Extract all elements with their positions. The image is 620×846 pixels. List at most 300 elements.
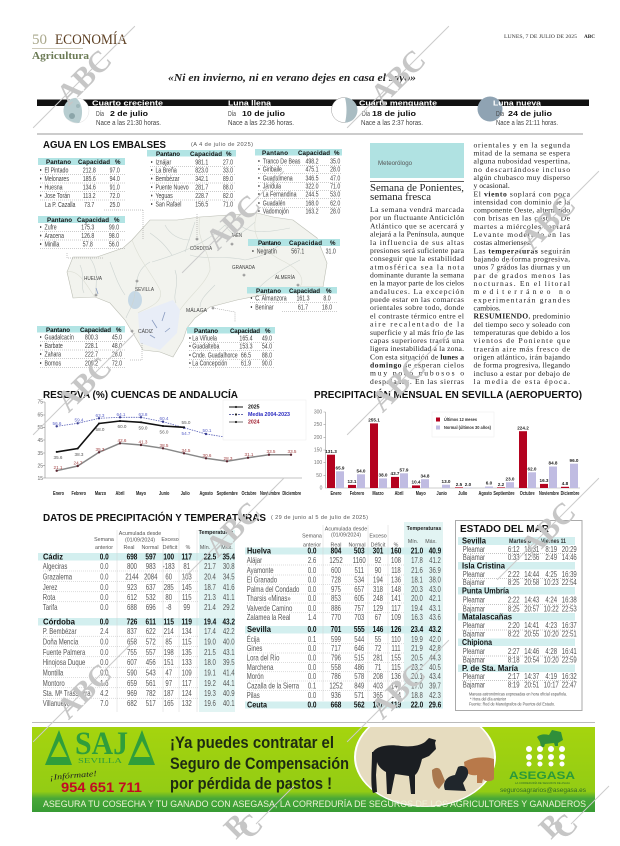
table: cadiz y cordoba: 0.0 <box>100 574 108 582</box>
table: cadiz y cordoba: 30.8 <box>223 563 235 571</box>
table: cadiz y cordoba: 117 <box>182 552 192 562</box>
table: pantanos 2: 99.0 <box>109 224 120 232</box>
table: huelva, sevilla y ceuta: 17.8 <box>411 558 423 565</box>
article column 2: componente Oeste, alternando <box>474 206 570 215</box>
ad logo: ASEGASA: ASEGASA <box>509 770 575 782</box>
table: cadiz y cordoba: 7.0 <box>100 701 108 708</box>
table: pantanos 3: • Bembézar <box>151 175 179 183</box>
table: huelva, sevilla y ceuta: 164 <box>391 693 401 700</box>
table: cadiz y cordoba: 41.6 <box>223 584 235 592</box>
table: huelva, sevilla y ceuta: 0.0 <box>308 700 316 710</box>
table: pantanos 8: 66.5 <box>241 352 252 360</box>
table: huelva, sevilla y ceuta: Normal <box>348 542 366 548</box>
table: huelva, sevilla y ceuta: Cazalla de la Sierra <box>247 683 299 691</box>
table: cadiz y cordoba: 41.1 <box>223 594 235 602</box>
panel: estado del mar: 4:19 <box>545 673 557 681</box>
heading: datos de precipitacion <box>43 511 368 524</box>
table: pantanos 7: 222.7 <box>85 351 99 359</box>
table: pantanos 4: 498.2 <box>305 158 319 166</box>
panel: estado del mar: Sevilla <box>462 536 487 546</box>
moon phases strip: Cuarto menguante <box>359 98 437 108</box>
table: huelva, sevilla y ceuta: 42.0 <box>429 636 441 644</box>
table: pantanos 1: 185.6 <box>83 175 96 183</box>
article column 1: Atlántico que se acercará y <box>370 221 464 230</box>
article column 2: unos 7 grados las diurnas y un <box>474 263 570 272</box>
panel: estado del mar: P. de Sta. María <box>462 664 519 673</box>
table: pantanos 2: 175.3 <box>81 224 95 232</box>
table: cadiz y cordoba: 969 <box>127 691 137 698</box>
table: pantanos 8: • Guadalteba <box>189 343 220 351</box>
map labels: CÓRDOBA <box>190 245 212 252</box>
table: huelva, sevilla y ceuta: 555 <box>354 624 365 634</box>
chart months: Septiembre <box>493 490 515 496</box>
table: cadiz y cordoba: 109 <box>182 670 192 678</box>
table: huelva, sevilla y ceuta: 0.1 <box>308 636 316 644</box>
table: huelva, sevilla y ceuta: 0.0 <box>308 624 316 634</box>
table: cadiz y cordoba: 17.4 <box>204 629 216 636</box>
table: pantanos 4: • La Fernandina <box>258 191 297 199</box>
article column 2 <box>474 140 571 386</box>
table: huelva, sevilla y ceuta: 0.0 <box>308 568 316 575</box>
bar chart: precipitacion sevilla: 10.4 <box>412 480 421 484</box>
article column 2: nocturnas. En el litoral <box>474 279 570 288</box>
panel: estado del mar: 0:33 <box>508 555 520 562</box>
table: huelva, sevilla y ceuta: 23.4 <box>411 624 424 634</box>
map labels: SEVILLA <box>135 287 154 293</box>
panel: estado del mar: Bajamar <box>463 631 486 639</box>
bar chart: precipitacion sevilla: 16.3 <box>540 478 549 483</box>
bar chart: precipitacion sevilla: 100 <box>314 460 322 466</box>
table: huelva, sevilla y ceuta: 0.1 <box>308 683 316 691</box>
table: cadiz y cordoba: 18.0 <box>204 660 216 667</box>
sea table notes: * Hora del día anterior <box>470 696 506 702</box>
ad logo: ASAJA: ¡Infórmate! <box>49 769 97 782</box>
table: pantanos 7: Pantano <box>46 327 70 334</box>
table: cadiz y cordoba: Déficit <box>163 545 178 551</box>
table: pantanos 3: 71.0 <box>223 201 234 209</box>
panel: estado del mar: 16:38 <box>562 597 577 605</box>
table: cadiz y cordoba: 35.4 <box>222 552 236 562</box>
table: huelva, sevilla y ceuta: 1.4 <box>308 615 316 622</box>
table: cadiz y cordoba: 983 <box>146 563 156 571</box>
table: cadiz y cordoba: 597 <box>145 552 156 562</box>
table: pantanos 8: • La Concepción <box>189 360 228 368</box>
ad logo: ASEGASA: LA CORREDURÍA DE SEGUROS DE ASAJA <box>515 781 570 785</box>
bar chart: precipitacion sevilla: 12.1 <box>348 479 357 484</box>
table: huelva, sevilla y ceuta: 20.1 <box>411 674 423 681</box>
table: huelva, sevilla y ceuta: 578 <box>354 674 364 681</box>
heading: agua en los embalses <box>43 140 253 151</box>
table: pantanos 4: • Vadomojón <box>258 208 289 216</box>
article column 1: domingo se esperan cielos <box>370 360 464 370</box>
line chart: reserva: 59.4 <box>75 418 84 422</box>
table: cadiz y cordoba: Córdoba <box>43 618 76 626</box>
page header: 50 <box>32 32 47 48</box>
table: pantanos 4: • Jándula <box>258 183 282 191</box>
table: pantanos 6: Capacidad <box>289 288 320 295</box>
panel: estado del mar: Bajamar <box>463 606 486 614</box>
table: pantanos 6: 18.0 <box>322 304 333 312</box>
article column 2: origen atlántico, irán bajando <box>474 352 570 362</box>
table: huelva, sevilla y ceuta: 160 <box>391 546 401 556</box>
table: pantanos 3: 27.0 <box>223 159 234 167</box>
table: huelva, sevilla y ceuta: 701 <box>331 624 342 634</box>
table: cadiz y cordoba: 43.1 <box>223 649 235 657</box>
bar chart: precipitacion sevilla: 43.7 <box>391 471 400 476</box>
table: huelva, sevilla y ceuta: 16.3 <box>411 615 423 622</box>
table: cadiz y cordoba: 115 <box>182 594 192 602</box>
table: huelva, sevilla y ceuta: 141 <box>391 596 401 603</box>
table: huelva, sevilla y ceuta: 20.0 <box>411 596 423 603</box>
table: huelva, sevilla y ceuta: 44.3 <box>429 655 441 663</box>
table: huelva, sevilla y ceuta: 657 <box>354 587 364 594</box>
article column 2: martes a miércoles soplará <box>474 222 571 231</box>
icon: cuarto creciente <box>64 98 89 123</box>
table: huelva, sevilla y ceuta: 318 <box>373 587 383 594</box>
table: pantanos 6: 8.0 <box>323 295 331 303</box>
panel: estado del mar: ESTADO DEL MAR <box>460 524 549 535</box>
table: huelva, sevilla y ceuta: 0.0 <box>308 674 316 681</box>
panel: estado del mar: Viernes 11 <box>541 538 566 545</box>
table: cadiz y cordoba: Sta. Mª Trassierra <box>43 689 91 698</box>
table: huelva, sevilla y ceuta: Tharsis «Minas» <box>247 596 291 603</box>
chart months: Agosto <box>479 490 492 496</box>
panel: estado del mar: Bajamar <box>463 682 486 690</box>
table: cadiz y cordoba: Jerez <box>43 584 58 592</box>
table: pantanos 3: Pantano <box>156 151 180 158</box>
table: pantanos 4: 168.0 <box>305 200 319 208</box>
table: cadiz y cordoba: Temperaturas <box>199 530 233 536</box>
table: pantanos 6: • C. Almanzora <box>250 295 287 303</box>
table: cadiz y cordoba: 22.5 <box>204 552 217 562</box>
table: huelva, sevilla y ceuta: Gines <box>247 646 263 653</box>
table: huelva, sevilla y ceuta: 0.0 <box>308 693 316 700</box>
table: pantanos 4: 47.0 <box>330 175 341 183</box>
panel: estado del mar: 22:51 <box>562 631 577 639</box>
watermark: ABC stamps: ABC <box>364 43 432 111</box>
table: huelva, sevilla y ceuta: 0.0 <box>308 596 316 603</box>
panel: estado del mar: 20:54 <box>524 657 539 665</box>
table: pantanos 3: 281.7 <box>195 184 209 192</box>
panel: estado del mar: 22:53 <box>562 606 577 614</box>
moon phases strip: 10 de julio <box>242 109 285 118</box>
table: huelva, sevilla y ceuta: 786 <box>331 674 341 681</box>
table: pantanos 3: 228.7 <box>195 192 209 200</box>
chart months: Febrero <box>350 490 364 496</box>
table: huelva, sevilla y ceuta: Morón <box>247 674 264 681</box>
article column 2: alguna nubosidad vespertina, <box>474 157 570 166</box>
line chart: reserva: 75 <box>37 400 43 406</box>
table: pantanos 3: 342.1 <box>195 175 209 183</box>
chart months: Agosto <box>200 490 213 496</box>
table: cadiz y cordoba: Normal <box>141 545 159 551</box>
table: pantanos 6: 161.3 <box>296 295 310 303</box>
table: cadiz y cordoba: 40.0 <box>223 639 235 647</box>
table: huelva, sevilla y ceuta: 40.5 <box>429 664 441 672</box>
table: cadiz y cordoba: 923 <box>127 584 137 592</box>
bar chart: precipitacion sevilla: 255.1 <box>368 418 380 422</box>
panel: estado del mar: 20:58 <box>524 580 539 587</box>
table: cadiz y cordoba: 572 <box>146 639 156 647</box>
watermark: ABC stamps: C <box>546 807 585 846</box>
table: cadiz y cordoba: 0.0 <box>100 563 108 571</box>
table: pantanos 1: 134.6 <box>83 184 96 192</box>
panel: estado del mar: 10:23 <box>544 580 559 587</box>
table: pantanos 4: 322.0 <box>305 183 319 191</box>
table: huelva, sevilla y ceuta: 42.3 <box>429 693 441 700</box>
table: cadiz y cordoba: 43.2 <box>222 617 235 627</box>
table: cadiz y cordoba: 19.3 <box>204 691 216 698</box>
table: pantanos 4: 475.1 <box>305 166 319 174</box>
table: pantanos 4: 28.0 <box>330 208 341 216</box>
table: huelva, sevilla y ceuta: 126 <box>391 624 401 634</box>
table: huelva, sevilla y ceuta: 194 <box>373 577 383 585</box>
table: huelva, sevilla y ceuta: Sevilla <box>247 625 272 634</box>
panel: estado del mar: 6:12 <box>508 546 520 554</box>
table: cadiz y cordoba: Rota <box>43 594 55 602</box>
table: cadiz y cordoba: 698 <box>127 552 137 562</box>
table: pantanos 7: • Barbate <box>40 342 63 350</box>
table: pantanos 5: Capacidad <box>289 240 322 247</box>
watermark: ABC stamps: ABC <box>364 350 432 418</box>
table: cadiz y cordoba: Semana <box>94 537 114 543</box>
table: cadiz y cordoba: 41.4 <box>223 670 235 678</box>
table: huelva, sevilla y ceuta: 703 <box>354 615 364 622</box>
panel: meteorologo <box>370 143 464 182</box>
table: huelva, sevilla y ceuta: 717 <box>331 646 341 653</box>
table: huelva, sevilla y ceuta: 41.2 <box>429 558 441 565</box>
table: pantanos 4: % <box>334 150 340 157</box>
article column 1: La semana vendrá marcada <box>370 205 465 214</box>
table: pantanos 8: 54.0 <box>262 343 273 351</box>
table: cadiz y cordoba: 117 <box>182 680 192 688</box>
table: cadiz y cordoba: -183 <box>163 563 175 571</box>
table: cadiz y cordoba: 517 <box>146 701 156 708</box>
page header: LUNES, 7 DE JULIO DE 2025 <box>504 34 577 40</box>
moon phases strip: 18 de julio <box>372 109 416 118</box>
table: pantanos 6: 61.7 <box>298 304 309 312</box>
table: huelva, sevilla y ceuta: 1252 <box>329 558 343 565</box>
table: huelva, sevilla y ceuta: Ceuta <box>247 700 267 710</box>
table: cadiz y cordoba: 800 <box>127 563 137 571</box>
panel: estado del mar: Martes 8 <box>509 538 531 545</box>
watermark: ABC stamps: ABC <box>364 657 432 725</box>
table: pantanos 5: 31.0 <box>326 248 336 256</box>
moon phases strip: Luna llena <box>228 98 272 108</box>
panel: estado del mar: 14:41 <box>524 623 539 630</box>
bar chart: precipitacion sevilla: 300 <box>314 410 322 416</box>
table: huelva, sevilla y ceuta: 115 <box>391 664 401 672</box>
line chart: reserva: 31.1 <box>245 452 254 457</box>
table: huelva, sevilla y ceuta: 757 <box>354 605 364 613</box>
article column 1: por un fluctuante Anticiclón <box>370 213 464 222</box>
table: cadiz y cordoba: 2084 <box>144 574 157 582</box>
table: huelva, sevilla y ceuta: 0.0 <box>308 605 316 613</box>
table: cadiz y cordoba: 20.4 <box>204 574 216 582</box>
table: huelva, sevilla y ceuta: 148 <box>391 587 401 594</box>
chart legend <box>223 400 306 440</box>
chart months: Julio <box>181 490 190 496</box>
table: huelva, sevilla y ceuta: 646 <box>354 646 364 653</box>
table: huelva, sevilla y ceuta: 605 <box>354 596 364 603</box>
line chart: reserva: 38.5 <box>160 443 169 448</box>
table: cadiz y cordoba: 21.3 <box>204 594 216 602</box>
table: huelva, sevilla y ceuta: 136 <box>391 577 401 585</box>
table: huelva, sevilla y ceuta: 544 <box>354 636 364 644</box>
table: cadiz y cordoba: 0.0 <box>100 649 108 657</box>
watermark: ABC stamps: ABC <box>514 495 582 563</box>
table: huelva, sevilla y ceuta: Zalamea la Real <box>247 615 291 622</box>
table: cadiz y cordoba: 34.5 <box>223 574 235 582</box>
panel: estado del mar: 22:54 <box>562 580 577 587</box>
table: pantanos 7: Capacidad <box>80 327 111 334</box>
table: pantanos 7: % <box>116 327 122 334</box>
table: pantanos 3 <box>147 150 236 209</box>
table: pantanos 8: 165.4 <box>239 335 253 343</box>
table: cadiz y cordoba: 198 <box>164 649 174 657</box>
line chart: reserva: 33.5 <box>288 449 297 454</box>
line chart: reserva: 64.1 <box>117 412 126 417</box>
table: pantanos 6: Pantano <box>256 288 281 295</box>
article column 1: Con esta situación de lunes a <box>370 352 464 361</box>
chart months: Abril <box>116 490 124 496</box>
chart months: Abril <box>395 490 403 496</box>
table: cadiz y cordoba: 21.7 <box>204 563 216 571</box>
panel: estado del mar: Pleamar <box>463 546 486 554</box>
table: huelva, sevilla y ceuta: 43.0 <box>429 587 441 594</box>
bar chart: precipitacion sevilla: 2.2 <box>498 482 505 487</box>
table: pantanos 4: Capacidad <box>298 150 330 157</box>
moon phases strip: Día <box>362 111 370 118</box>
table: huelva, sevilla y ceuta: 17.0 <box>411 683 423 691</box>
table: huelva, sevilla y ceuta: 503 <box>354 546 365 556</box>
table: pantanos 8: % <box>265 328 271 335</box>
table: cadiz y cordoba: 97 <box>165 680 172 688</box>
table: huelva, sevilla y ceuta: 22.0 <box>411 700 423 710</box>
article column 2: la media de esta época. <box>474 377 570 386</box>
headline: Semana de Ponientes, <box>370 183 464 194</box>
table: pantanos 8: 90.0 <box>262 360 273 368</box>
table: cadiz y cordoba: 659 <box>127 680 137 688</box>
article column 2: mediterráneo no <box>474 287 570 296</box>
chart months: Diciembre <box>282 490 302 496</box>
chart months: Marzo <box>95 490 106 496</box>
heading: agua en los embalses: AGUA EN LOS EMBALSES <box>43 140 166 151</box>
table: pantanos 7: • Bornos <box>40 360 61 368</box>
article column 1: ligera inestabilidad a la zona. <box>370 344 464 353</box>
table: cadiz y cordoba: 145 <box>182 584 192 592</box>
table: cadiz y cordoba: Exceso <box>161 537 179 543</box>
article column 2: temperaturas que debido a los <box>474 328 570 337</box>
panel: estado del mar: 2:27 <box>508 649 520 656</box>
article column 2: y ocasional. <box>474 181 510 190</box>
table: pantanos 2: 126.8 <box>81 232 95 240</box>
table: cadiz y cordoba: anterior <box>95 545 113 551</box>
table: huelva, sevilla y ceuta: Mín. <box>408 539 418 545</box>
table: huelva, sevilla y ceuta: 43.6 <box>429 615 441 622</box>
panel: estado del mar: 14:46 <box>524 649 539 656</box>
article column 2: con brisas en las costas. De <box>474 214 571 223</box>
table: cadiz y cordoba: 19.4 <box>204 617 217 627</box>
line chart: reserva: 60.4 <box>160 416 169 421</box>
line chart: reserva: 58.0 <box>96 427 105 432</box>
table: pantanos 3: 82.0 <box>223 192 234 200</box>
panel: estado del mar: 8:22 <box>508 631 520 639</box>
article column 1: atmosférica sea la nota <box>370 262 465 271</box>
table: huelva, sevilla y ceuta: 108 <box>391 558 401 565</box>
line chart: reserva: 55.0 <box>182 420 191 425</box>
table: cadiz y cordoba: 837 <box>127 629 137 636</box>
panel: estado del mar: 16:39 <box>562 571 577 579</box>
chart months <box>330 490 580 496</box>
table: pantanos 8: Pantano <box>194 328 218 335</box>
table: cadiz y cordoba: 99 <box>183 605 190 612</box>
table: huelva, sevilla y ceuta: 796 <box>331 655 341 663</box>
advertisement banner <box>32 727 595 812</box>
table: cadiz y cordoba: 47 <box>165 670 172 678</box>
table: pantanos 4: 53.0 <box>330 191 341 199</box>
article column 1: superficie y al más frío de las <box>370 328 464 337</box>
table: huelva, sevilla y ceuta: Alájar <box>247 558 263 565</box>
table: cadiz y cordoba: 782 <box>146 691 156 698</box>
line chart: reserva: 45 <box>37 438 43 444</box>
map labels: GRANADA <box>232 265 255 271</box>
map labels: JAÉN <box>231 232 242 239</box>
bar chart: precipitacion sevilla: 65.9 <box>336 466 345 470</box>
table: huelva, sevilla y ceuta: 18.8 <box>411 693 423 700</box>
table: huelva, sevilla y ceuta: 0.0 <box>308 646 316 653</box>
line chart: reserva: 15 <box>37 476 43 482</box>
line chart: reserva: 59.0 <box>139 426 148 430</box>
table: huelva, sevilla y ceuta: 20.3 <box>411 587 423 594</box>
table: pantanos 2: • Zufre <box>40 224 57 232</box>
table: pantanos 1: 113.2 <box>83 192 96 200</box>
table: pantanos 7 <box>37 326 125 368</box>
table: cadiz y cordoba: 21.5 <box>204 649 216 657</box>
panel: estado del mar: 10:22 <box>544 606 559 614</box>
table: cadiz y cordoba: 42.2 <box>223 629 235 636</box>
table: huelva, sevilla y ceuta: 1160 <box>353 558 366 565</box>
table: huelva, sevilla y ceuta: 0.0 <box>308 546 316 556</box>
table: huelva, sevilla y ceuta: 42.8 <box>429 646 441 653</box>
table: cadiz y cordoba: 0.0 <box>100 660 108 667</box>
table: huelva, sevilla y ceuta: 39.7 <box>429 683 441 691</box>
table: huelva, sevilla y ceuta: 119 <box>391 700 401 710</box>
table: pantanos 3: 33.0 <box>223 167 234 175</box>
bar chart: precipitacion sevilla: 2.0 <box>465 482 472 487</box>
panel: estado del mar: 8:25 <box>508 606 520 614</box>
moon phases strip: Nace a las 21:11 horas. <box>496 120 558 127</box>
headline <box>370 183 464 203</box>
article column 1: capas superiores traerá una <box>370 336 465 345</box>
article column 2: orientales y en la segunda <box>474 140 571 149</box>
table: pantanos 4: 62.0 <box>330 200 341 208</box>
bar chart: precipitacion sevilla: 224.2 <box>517 426 529 430</box>
panel: estado del mar: 2:17 <box>508 673 520 681</box>
table: huelva, sevilla y ceuta: Pilas <box>247 693 260 700</box>
table: huelva, sevilla y ceuta: 136 <box>391 674 401 681</box>
ad slogan: ASEGURA TU COSECHA Y TU GANADO CON ASEGASA, LA CORREDURÍA DE SEGUROS DE LOS AGRICULTORES Y GANADEROS <box>43 799 586 810</box>
line chart: reserva: 28.3 <box>224 456 233 461</box>
table: pantanos 8: 49.0 <box>262 335 273 343</box>
bar chart: precipitacion sevilla: 57.9 <box>400 468 409 472</box>
table: cadiz y cordoba: P. Bembézar <box>43 629 77 636</box>
table: huelva, sevilla y ceuta: 19.4 <box>411 605 423 613</box>
table: cadiz y cordoba: Real <box>124 545 134 551</box>
line chart: reserva: 25 <box>37 464 43 470</box>
table: huelva, sevilla y ceuta: 853 <box>331 596 341 603</box>
table: huelva, sevilla y ceuta: 92 <box>375 558 381 565</box>
